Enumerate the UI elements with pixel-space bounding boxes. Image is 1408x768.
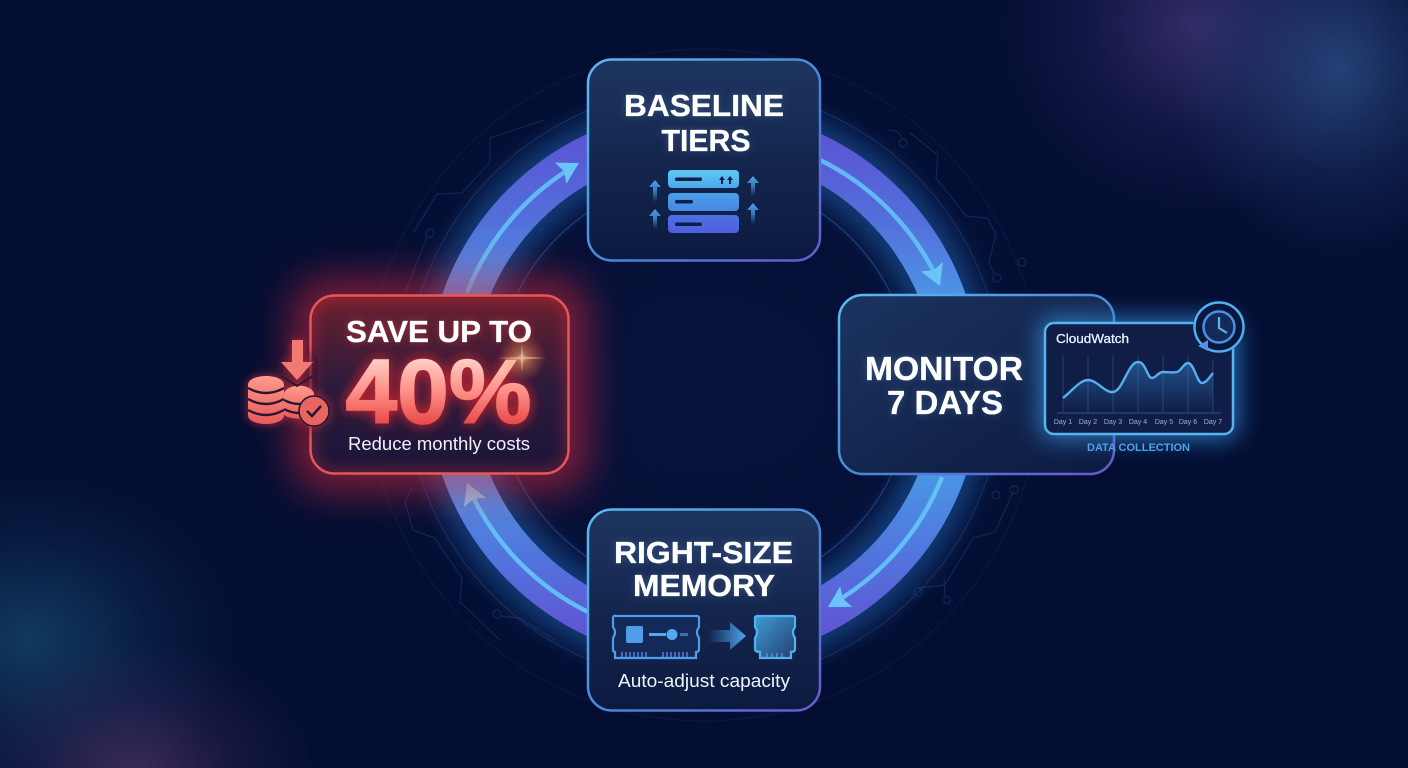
panel: baseline tiers xyxy=(588,60,820,260)
big number: 40%: 40% xyxy=(346,342,532,443)
heading: baseline tiers: BASELINE xyxy=(624,88,784,123)
panel: cloudwatch chart xyxy=(1040,301,1245,439)
day labels: Day 2 xyxy=(1079,419,1097,426)
arrow: monitor to right-size xyxy=(822,477,942,617)
icon: clock with cycle arrow xyxy=(1193,301,1245,353)
panel: monitor 7 days xyxy=(839,295,1114,474)
data collection label: DATA COLLECTION xyxy=(1087,442,1190,454)
caption: reduce monthly costs: Reduce monthly costs xyxy=(348,434,530,454)
heading: baseline tiers xyxy=(624,88,784,158)
icon: coins with down arrow and check xyxy=(248,340,329,428)
day labels: Day 3 xyxy=(1104,419,1122,426)
heading: save up to: SAVE UP TO xyxy=(346,314,532,349)
cycle ring band xyxy=(450,130,958,640)
heading: right-size memory: RIGHT-SIZE xyxy=(614,535,793,570)
chart title: CloudWatch xyxy=(1056,331,1129,346)
day labels: Day 1 xyxy=(1054,419,1072,426)
day labels: Day 7 xyxy=(1204,419,1222,426)
icon: small memory module xyxy=(755,616,795,658)
day labels: Day 6 xyxy=(1179,419,1197,426)
heading: baseline tiers: TIERS xyxy=(662,123,750,158)
flare xyxy=(498,334,546,382)
heading: right-size memory xyxy=(614,535,793,603)
heading: right-size memory: MEMORY xyxy=(633,568,775,603)
day labels: Day 4 xyxy=(1129,419,1147,426)
heading: monitor 7 days: 7 DAYS xyxy=(887,384,1003,421)
line chart xyxy=(1057,355,1221,413)
arrow: right-size to save xyxy=(456,478,588,612)
panel: right-size memory xyxy=(588,510,820,710)
day labels: Day 5 xyxy=(1155,419,1173,426)
red card glow xyxy=(292,278,588,492)
day labels xyxy=(1054,419,1222,426)
icon: large memory module xyxy=(613,616,699,658)
panel: save up to 40% xyxy=(310,296,568,474)
heading: monitor 7 days xyxy=(865,350,1023,421)
circuit rings and traces xyxy=(368,49,1040,721)
heading: monitor 7 days: MONITOR xyxy=(865,350,1023,387)
arrow: baseline to monitor xyxy=(820,160,951,291)
arrow: red card to baseline xyxy=(467,153,585,293)
icon: shrink arrow xyxy=(708,622,746,650)
caption: auto-adjust capacity: Auto-adjust capacity xyxy=(618,671,790,691)
icon: server tiers xyxy=(649,170,759,233)
